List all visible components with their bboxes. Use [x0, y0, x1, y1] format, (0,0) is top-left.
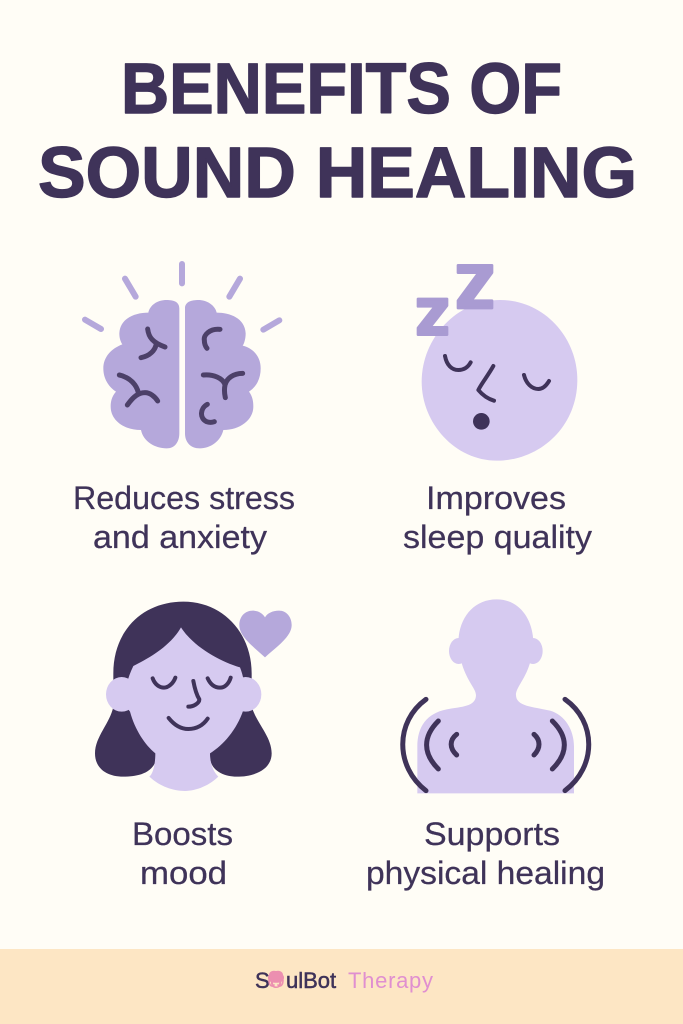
- text: supports healing: physical healing: [366, 855, 605, 891]
- text: reduces stress: and anxiety: [93, 519, 267, 555]
- icon: smiling woman with heart: [95, 602, 292, 791]
- footer logo: Therapy: [348, 968, 433, 993]
- text: improves sleep: sleep quality: [403, 519, 592, 555]
- text: boosts mood: Boosts: [132, 816, 233, 852]
- icon: sleeping face: [418, 265, 577, 461]
- icon: brain with radiating lines: [85, 264, 279, 448]
- icon: body with vibration waves: [403, 599, 589, 793]
- text: reduces stress: Reduces stress: [73, 480, 295, 516]
- footer band: [0, 949, 683, 1024]
- footer logo: o: [270, 968, 282, 993]
- footer logo: ulBot: [286, 968, 336, 993]
- footer logo: [255, 968, 433, 993]
- icon: logo brain: [268, 971, 284, 986]
- text: boosts mood: mood: [140, 855, 227, 891]
- text: improves sleep: Improves: [426, 480, 566, 516]
- title: SOUND HEALING: [38, 134, 637, 213]
- text: supports healing: Supports: [424, 816, 560, 852]
- title: BENEFITS OF: [121, 50, 562, 129]
- title: [38, 50, 637, 213]
- footer logo: S: [255, 968, 270, 993]
